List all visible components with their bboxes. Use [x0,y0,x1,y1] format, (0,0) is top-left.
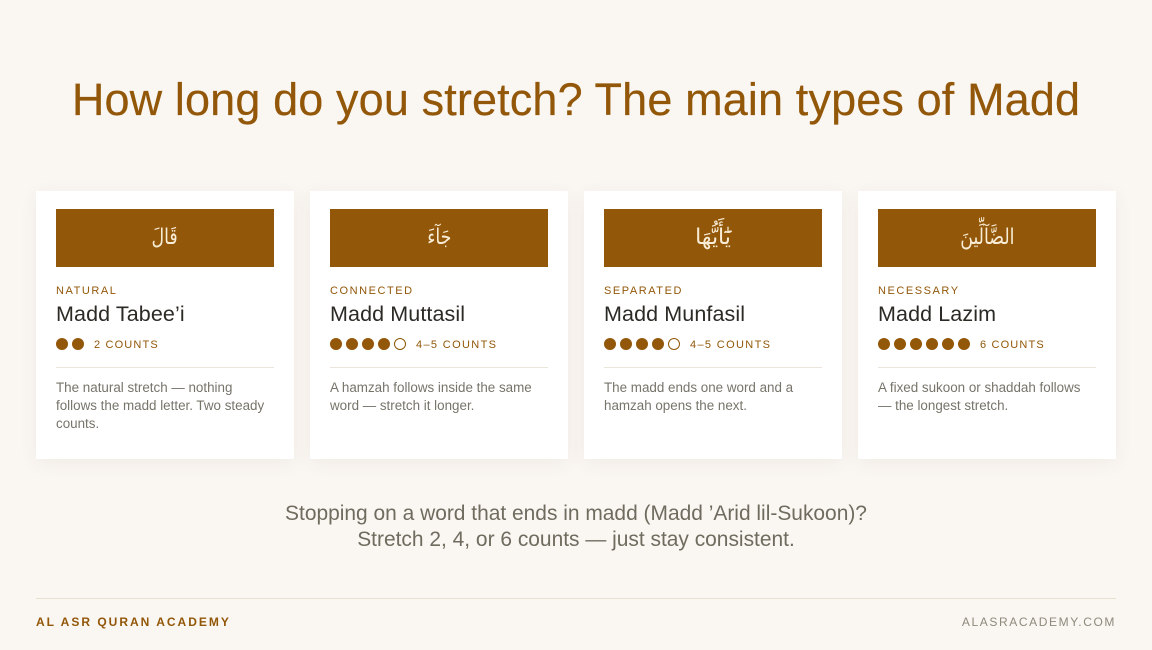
count label: 4–5 COUNTS [690,339,771,351]
count label: 2 COUNTS [94,339,159,351]
panel: Madd Muttasil [310,191,568,459]
panel: Madd Munfasil [584,191,842,459]
note about stopping: Stretch 2, 4, or 6 counts — just stay consistent. [357,528,795,551]
count label: 6 COUNTS [980,339,1045,351]
note about stopping [285,502,867,551]
description: A fixed sukoon or shaddah follows [878,380,1080,395]
category label: NECESSARY [878,285,960,297]
category label: CONNECTED [330,285,414,297]
title: How long do you stretch? The main types of Madd [72,74,1080,125]
arabic word band [330,209,548,267]
note about stopping: Stopping on a word that ends in madd (Madd ’Arid lil-Sukoon)? [285,502,867,525]
card heading: Madd Tabee’i [56,302,185,326]
description [604,380,794,413]
footer website: ALASRACADEMY.COM [962,615,1116,629]
arabic word band [878,209,1096,267]
count dots [604,338,680,350]
arabic word band: جَآءَ [427,225,451,250]
description: The natural stretch — nothing [56,380,232,395]
count dots [56,338,84,350]
arabic word band: يَٰٓأَيُّهَا [695,225,731,250]
description: A hamzah follows inside the same [330,380,532,395]
card heading: Madd Muttasil [330,302,465,326]
card heading: Madd Lazim [878,302,996,326]
arabic word band [604,209,822,267]
count dots [330,338,406,350]
arabic word band: الضَّآلِّينَ [960,225,1014,250]
footer brand: AL ASR QURAN ACADEMY [36,615,231,629]
description: counts. [56,416,99,431]
panel: Madd Lazim [858,191,1116,459]
description: — the longest stretch. [878,398,1008,413]
category label: NATURAL [56,285,117,297]
description: follows the madd letter. Two steady [56,398,264,413]
description [878,380,1080,413]
description [56,380,264,431]
arabic word band: قَالَ [152,225,178,250]
description: word — stretch it longer. [330,398,474,413]
count label: 4–5 COUNTS [416,339,497,351]
card heading: Madd Munfasil [604,302,745,326]
description: The madd ends one word and a [604,380,793,395]
description: hamzah opens the next. [604,398,747,413]
category label: SEPARATED [604,285,683,297]
arabic word band [56,209,274,267]
count dots [878,338,970,350]
panel: Madd Tabee'i [36,191,294,459]
description [330,380,532,413]
